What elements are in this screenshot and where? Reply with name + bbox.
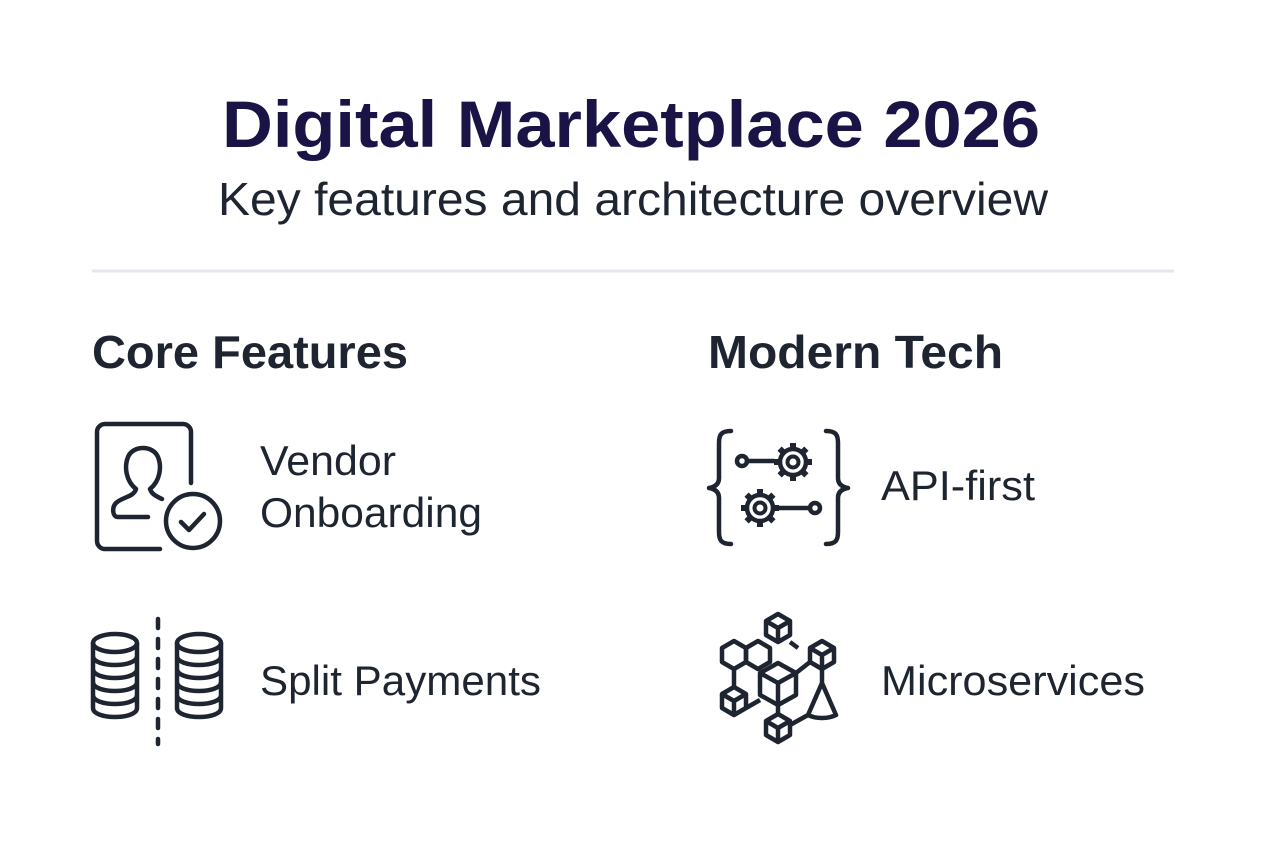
text: split payments: Split Payments xyxy=(260,657,541,704)
heading: modern tech: Modern Tech xyxy=(708,326,1003,378)
subtitle: Key features and architecture overview xyxy=(218,173,1049,225)
panel: modern tech xyxy=(708,326,1145,742)
icon: split payments xyxy=(93,619,221,744)
text: api-first: API-first xyxy=(881,462,1035,509)
text: microservices: Microservices xyxy=(881,657,1145,704)
icon: api-first xyxy=(709,431,848,544)
icon: vendor onboarding xyxy=(97,424,220,549)
title: Digital Marketplace 2026 xyxy=(222,87,1040,161)
text: vendor onboarding: Vendor xyxy=(260,437,396,484)
text: vendor onboarding: Onboarding xyxy=(260,489,482,536)
heading: core features: Core Features xyxy=(92,326,408,378)
icon: microservices xyxy=(722,614,836,742)
panel: core features xyxy=(92,326,541,744)
